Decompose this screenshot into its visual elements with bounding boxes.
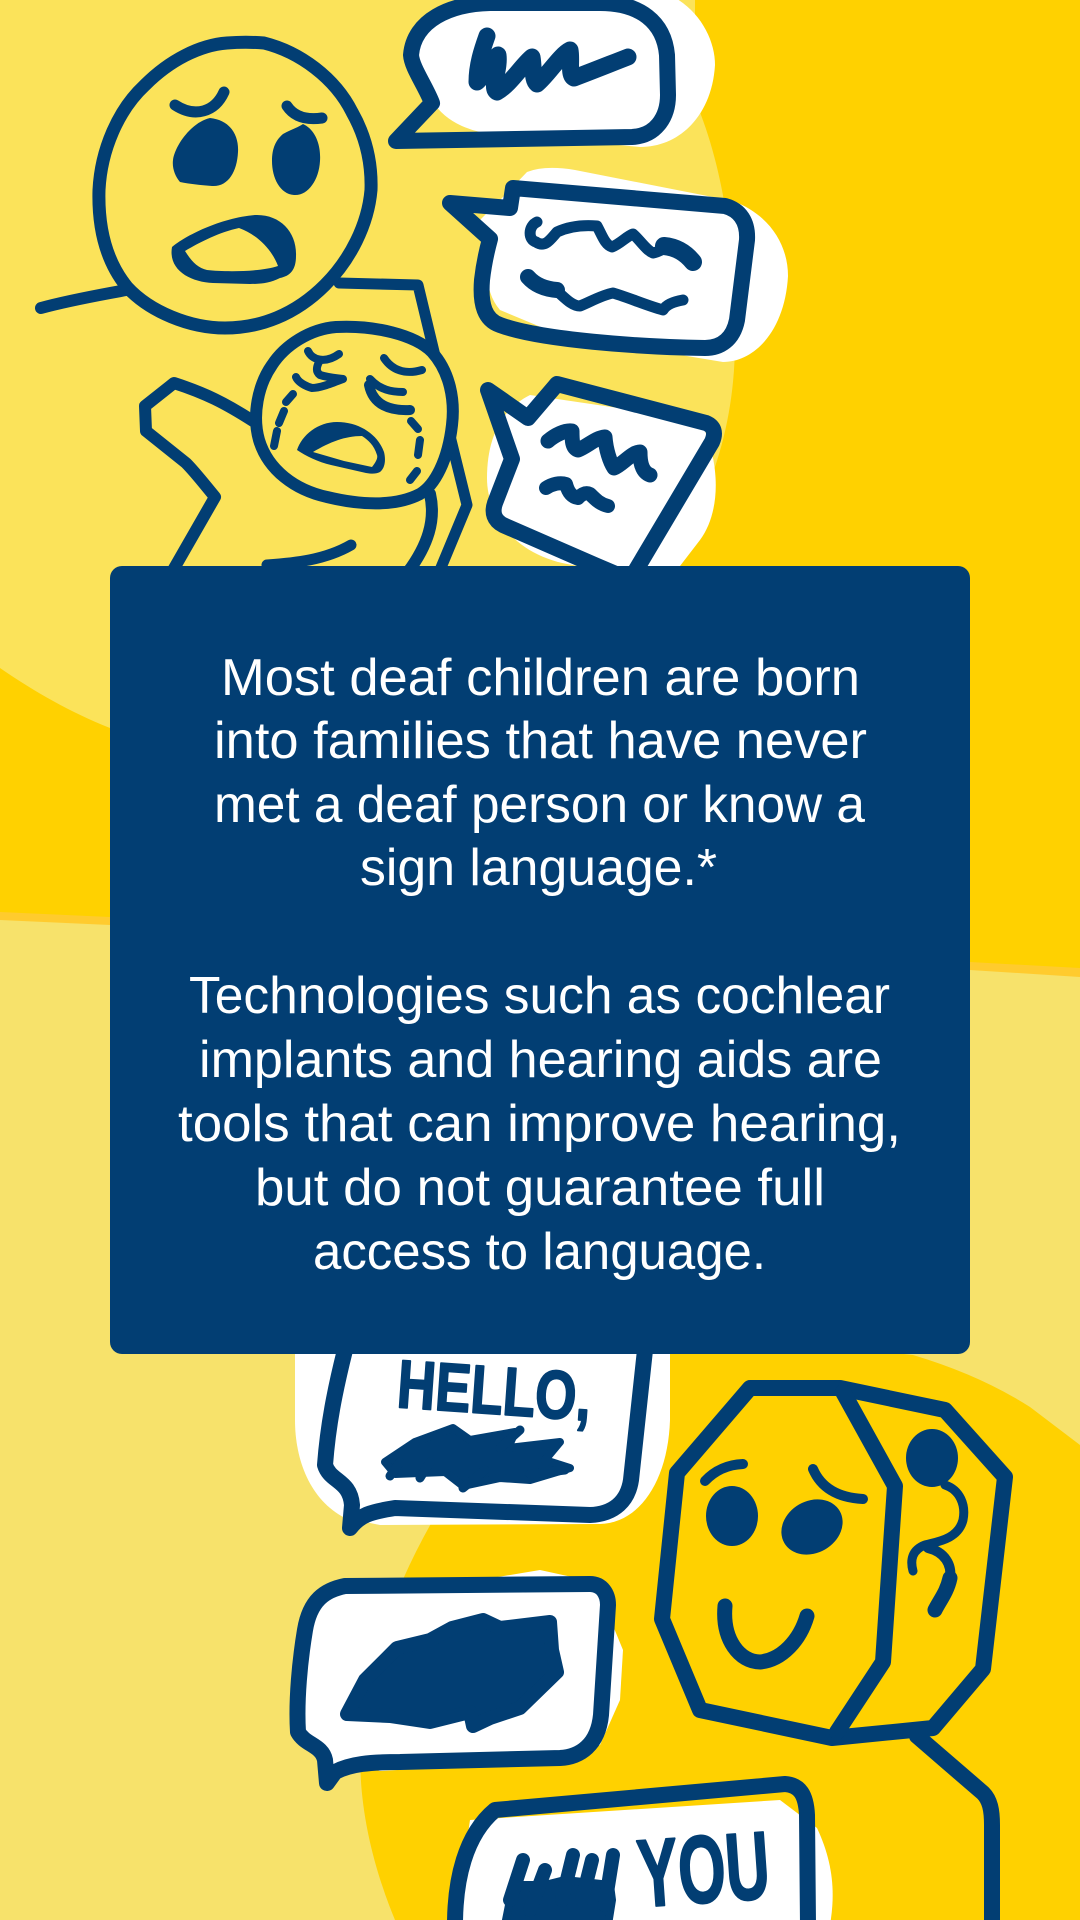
bubble 3 white blob (487, 395, 716, 566)
signer face plane line (837, 1392, 895, 1732)
child mouth (297, 422, 385, 474)
middle bubble outline (297, 1584, 608, 1783)
paragraph 1: met a deaf person or know a (214, 776, 865, 834)
paragraph 2 (178, 967, 901, 1281)
child body right side (408, 494, 432, 572)
you white blob (455, 1800, 833, 1920)
signer head (662, 1388, 1005, 1738)
signer smile (725, 1606, 807, 1662)
speech bubble YOU (455, 1784, 833, 1920)
signer eyes (706, 1486, 853, 1566)
speech bubble HELLO (295, 1340, 670, 1528)
parent eyebrows (175, 92, 322, 119)
signer eyebrows (705, 1464, 863, 1499)
paragraph 2: but do not guarantee full (255, 1159, 825, 1217)
signer ear (906, 1429, 964, 1610)
signer body (917, 1736, 992, 1920)
middle bubble white blob (340, 1570, 623, 1771)
child tears (274, 394, 420, 480)
hello outline (325, 1350, 645, 1528)
parent mouth (172, 215, 296, 284)
paragraph 1: sign language.* (360, 839, 717, 897)
bubble 1 white blob (416, 0, 715, 147)
hello white blob (295, 1340, 670, 1525)
parent raised arm (339, 283, 436, 360)
child arm and body (145, 383, 253, 572)
bubble 1 outline (396, 3, 668, 141)
bubble 2 outline (450, 188, 747, 348)
parent body line (440, 440, 467, 570)
speech bubble 1 (396, 0, 715, 147)
speech bubble 3 (487, 384, 716, 580)
bubble 1 scribble (477, 36, 628, 92)
speech bubble 2 (450, 168, 788, 362)
paragraph 2: implants and hearing aids are (199, 1031, 882, 1089)
paragraph 2: tools that can improve hearing, (178, 1095, 901, 1153)
child eyebrows and closed eyes (296, 351, 422, 392)
parent left arm (41, 290, 126, 308)
you outline (455, 1784, 808, 1920)
text panel (110, 566, 970, 1354)
parent head (99, 42, 371, 328)
bubble 3 scribbles (548, 431, 650, 475)
hello text: HELLO, (395, 1346, 594, 1435)
paragraph 1 (214, 649, 867, 897)
child head (256, 327, 453, 503)
third character: smiling signer (662, 1388, 1005, 1920)
paragraph 1: Most deaf children are born (221, 649, 860, 707)
child belly line (267, 545, 351, 565)
hello scribble (385, 1428, 570, 1488)
paragraph 2: Technologies such as cochlear (189, 967, 890, 1025)
middle bubble scribble (347, 1620, 557, 1726)
paragraph 2: access to language. (313, 1223, 766, 1281)
speech bubble scribble (297, 1570, 623, 1783)
bubble 2 white blob (478, 168, 788, 362)
you scribble (505, 1855, 613, 1920)
bubble 2 scribbles (530, 222, 670, 253)
parent eyes (173, 118, 320, 195)
paragraph 1: into families that have never (214, 712, 867, 770)
child character: crying face (145, 327, 453, 572)
parent character: worried face (41, 42, 467, 570)
bubble 3 outline (488, 384, 714, 580)
child thick closed eye (369, 385, 410, 410)
